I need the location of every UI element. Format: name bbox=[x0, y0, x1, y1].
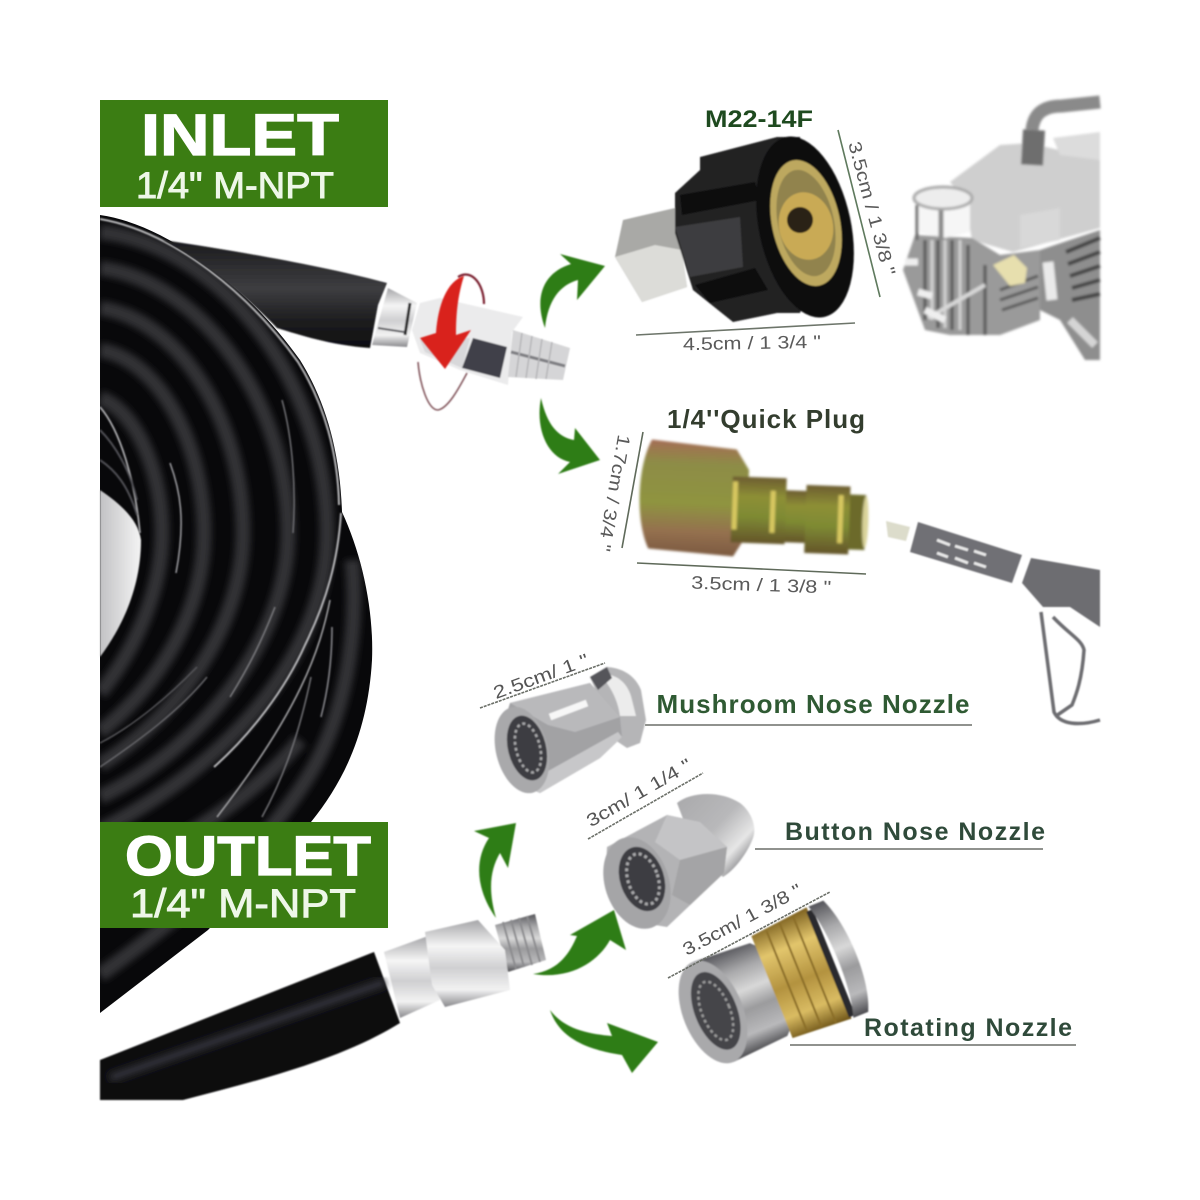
M22 diameter dimension bbox=[838, 130, 899, 297]
arrow to button nozzle bbox=[533, 910, 626, 975]
black collar bbox=[675, 137, 820, 322]
face bbox=[486, 701, 558, 799]
pressure washer bbox=[903, 102, 1100, 360]
outlet label: OUTLET bbox=[125, 824, 371, 887]
rotating nozzle bbox=[662, 897, 878, 1077]
dark hex flat bbox=[462, 338, 507, 378]
quick plug height dimension bbox=[594, 432, 643, 553]
inlet label: INLET bbox=[141, 103, 339, 168]
hose coil bbox=[100, 215, 372, 1013]
rotating nozzle size bbox=[668, 880, 830, 978]
button nozzle size: 3cm/ 1 1/4 " bbox=[583, 755, 695, 831]
motor bbox=[1040, 230, 1100, 360]
arrow to mushroom nozzle bbox=[474, 823, 516, 918]
gun body bbox=[1022, 558, 1100, 627]
coil centre opening bbox=[100, 490, 141, 657]
mushroom nose nozzle label: Mushroom Nose Nozzle bbox=[656, 689, 970, 719]
M22 length dimension bbox=[636, 323, 855, 354]
arrow to rotating nozzle bbox=[550, 1010, 658, 1073]
gun quick connector bbox=[886, 521, 910, 541]
M22-14F label: M22-14F bbox=[705, 106, 813, 133]
brass fitting bbox=[993, 255, 1027, 286]
mushroom size: 2.5cm/ 1 " bbox=[491, 650, 591, 703]
fine highlights bbox=[100, 219, 341, 817]
outlet label bbox=[100, 822, 388, 928]
outlet fitting bbox=[384, 914, 546, 1018]
gauge bbox=[917, 198, 970, 238]
ferrule bbox=[384, 936, 440, 1018]
M22-14F adapter bbox=[615, 127, 869, 327]
rotating nozzle size: 3.5cm/ 1 3/8 " bbox=[679, 880, 805, 960]
inlet hose sleeve bbox=[163, 240, 387, 348]
button nose nozzle label: Button Nose Nozzle bbox=[785, 818, 1045, 846]
quick plug bbox=[638, 439, 871, 561]
outlet label: 1/4" M-NPT bbox=[130, 882, 356, 926]
highlights bbox=[734, 481, 842, 543]
quick plug label: 1/4''Quick Plug bbox=[667, 404, 865, 434]
gun barrel bbox=[910, 522, 1022, 583]
spray gun bbox=[886, 521, 1100, 724]
arrow to M22 adapter bbox=[540, 254, 605, 328]
steel hex bbox=[615, 208, 687, 302]
quick plug length dimension bbox=[637, 563, 866, 597]
ferrule bbox=[372, 288, 417, 347]
M22 length dimension: 4.5cm / 1 3/4 " bbox=[683, 332, 821, 354]
brass insert bbox=[759, 153, 853, 293]
brass collar bbox=[749, 907, 852, 1042]
cap bbox=[590, 667, 646, 748]
quick plug height dimension: 1.7cm / 3/4 " bbox=[594, 433, 634, 553]
nose bbox=[677, 794, 754, 877]
neck bbox=[731, 476, 787, 544]
pump head bbox=[903, 235, 1040, 335]
threads bbox=[495, 914, 546, 972]
steel body bbox=[693, 936, 796, 1062]
mushroom nozzle bbox=[486, 667, 646, 799]
hex nut bbox=[425, 920, 510, 1007]
rotating nozzle label: Rotating Nozzle bbox=[864, 1014, 1072, 1042]
handle bbox=[1032, 102, 1100, 165]
groove bbox=[785, 490, 808, 543]
red arrow bbox=[420, 276, 471, 369]
outlet hose bbox=[100, 952, 400, 1100]
body bbox=[497, 683, 622, 793]
body bbox=[605, 815, 727, 927]
rotation arc bottom bbox=[418, 362, 467, 410]
hex nut bbox=[412, 298, 523, 385]
center bore bbox=[787, 207, 813, 233]
soft hose bands bbox=[100, 232, 354, 975]
female hex body bbox=[638, 439, 750, 557]
rotation arc top bbox=[458, 275, 484, 304]
M22 diameter dimension: 3.5cm / 1 3/8 " bbox=[844, 139, 899, 278]
end plate bbox=[808, 897, 878, 1018]
arrow to quick plug bbox=[540, 398, 600, 474]
rotation arrow bbox=[418, 275, 484, 410]
quick plug length dimension: 3.5cm / 1 3/8 " bbox=[691, 573, 832, 597]
infographic canvas bbox=[98, 94, 1102, 1102]
front face bbox=[741, 127, 869, 327]
top cover bbox=[950, 143, 1100, 252]
inlet fitting bbox=[372, 288, 570, 385]
button nozzle size bbox=[583, 755, 703, 839]
inlet label: 1/4" M-NPT bbox=[136, 165, 334, 206]
inlet label bbox=[100, 100, 388, 207]
face bbox=[665, 951, 761, 1073]
face bbox=[592, 828, 682, 938]
mushroom size bbox=[480, 650, 605, 708]
trigger guard bbox=[1041, 612, 1100, 724]
threads bbox=[508, 330, 570, 380]
dark ring bbox=[806, 909, 855, 1017]
head bbox=[804, 485, 851, 554]
tip bbox=[848, 494, 869, 550]
button nozzle bbox=[592, 794, 754, 938]
